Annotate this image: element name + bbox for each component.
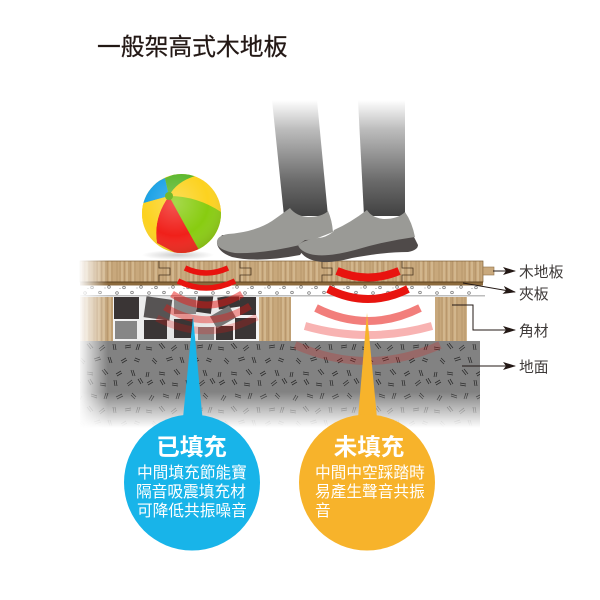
arrow: ground [462, 365, 515, 367]
label: wood floor: 木地板 [519, 264, 564, 281]
left side fade [78, 259, 108, 435]
callout: unfilled: 易產生聲音共振 [315, 483, 425, 501]
icon: beach ball [142, 174, 221, 253]
joist: right [435, 297, 467, 341]
callout: unfilled [299, 313, 435, 550]
shoe: right [298, 210, 418, 262]
label: ground: 地面 [519, 359, 549, 376]
label: plywood: 夾板 [519, 286, 549, 303]
joist: middle [259, 297, 291, 341]
callout: unfilled: 音 [315, 502, 331, 520]
wood floor [80, 261, 494, 286]
leg: right [358, 100, 405, 216]
callout: filled: 已填充 [156, 434, 227, 460]
callout: unfilled: 未填充 [334, 434, 404, 460]
ground bottom fade [78, 392, 482, 432]
callout: unfilled: 中間中空踩踏時 [315, 464, 425, 482]
plywood [80, 286, 485, 296]
ball shadow [142, 250, 214, 260]
fill material panel [113, 294, 259, 341]
sound waves: empty side [295, 271, 440, 361]
sound waves: filled side [157, 268, 257, 331]
callout: filled: 中間填充節能寶 [137, 463, 247, 482]
ground [80, 341, 480, 429]
title: 一般架高式木地板 [97, 34, 288, 61]
callout: filled: 隔音吸震填充材 [136, 483, 246, 501]
callout: filled: 可降低共振噪音 [137, 502, 247, 520]
arrow: plywood [463, 283, 515, 292]
callout: filled [124, 316, 260, 550]
joist: left [80, 297, 113, 341]
shoe: left [217, 208, 333, 260]
label: joist: 角材 [519, 323, 549, 340]
arrow: joist [452, 305, 515, 330]
arrow: wood floor [493, 270, 515, 272]
leg: left [272, 100, 328, 216]
